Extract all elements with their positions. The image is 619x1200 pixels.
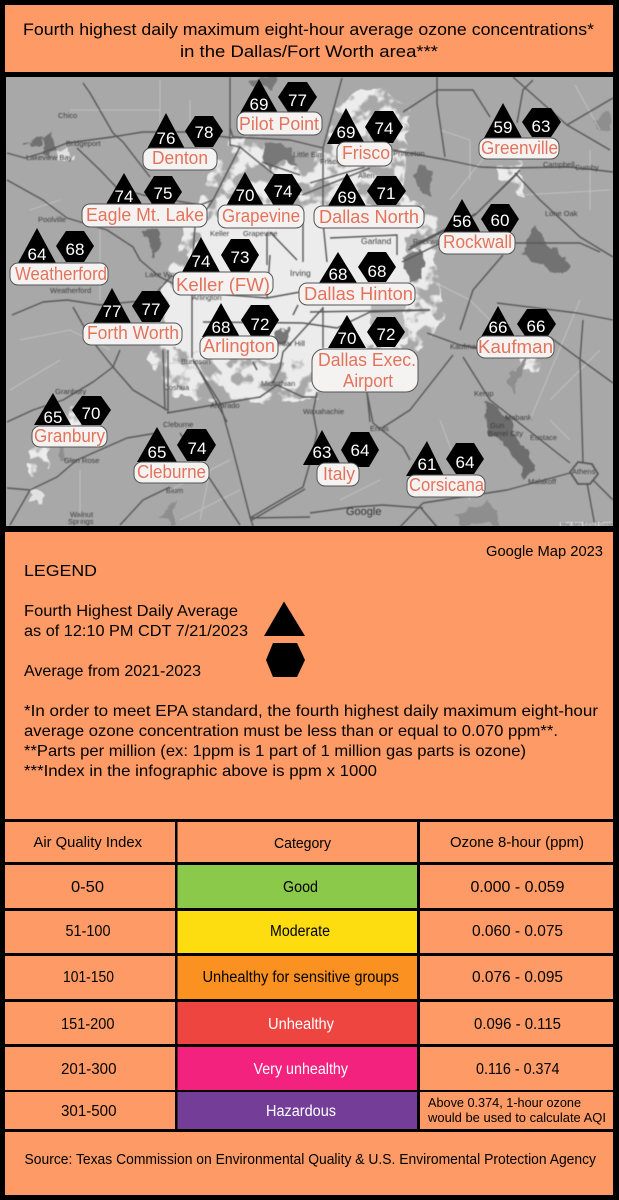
site marker: Italy xyxy=(303,430,379,486)
site marker: Rockwall: Rockwall xyxy=(443,232,512,252)
row: Unhealthy for sensitive groups xyxy=(5,956,613,999)
table header row xyxy=(5,822,613,862)
map place names: Malakoff xyxy=(528,477,557,486)
row: Hazardous: Hazardous xyxy=(266,1103,336,1120)
site marker: Kaufman: 66 xyxy=(527,317,545,336)
map place names: Kaufman xyxy=(450,342,480,351)
row: Very unhealthy: Very unhealthy xyxy=(254,1061,348,1078)
map place names: Frisco xyxy=(320,157,340,166)
site marker: Granbury: Granbury xyxy=(34,426,105,446)
site marker: Arlington: 72 xyxy=(251,315,269,334)
site marker: Frisco: Frisco xyxy=(342,143,390,163)
site marker: Grapevine: Grapevine xyxy=(222,206,300,226)
row: Good: 0-50 xyxy=(71,879,104,896)
map place names: Lone Oak xyxy=(545,209,578,218)
site marker: Weatherford: 64 xyxy=(28,245,46,264)
site marker: Eagle Mt. Lake: 75 xyxy=(154,184,172,203)
site marker: Greenville: Greenville xyxy=(481,138,558,158)
site marker: Grapevine: 74 xyxy=(274,182,292,201)
row: Very unhealthy: 201-300 xyxy=(61,1061,117,1078)
table header row: Category xyxy=(274,835,331,852)
site marker: Frisco xyxy=(327,108,403,166)
site marker: Eagle Mt. Lake: Eagle Mt. Lake xyxy=(86,205,204,225)
site marker: Dallas North: Dallas North xyxy=(319,207,419,227)
site marker: Pilot Point: 69 xyxy=(250,95,268,114)
site marker: Arlington: 68 xyxy=(212,318,230,337)
map place names: Burleson xyxy=(181,357,211,366)
site marker: Grapevine: 70 xyxy=(236,186,254,205)
map place names: Campbell xyxy=(543,160,575,169)
site marker: Arlington xyxy=(200,303,279,359)
map place names: Princeton xyxy=(393,149,425,158)
map place names: Garland xyxy=(361,236,392,246)
row: Moderate: 51-100 xyxy=(66,923,111,940)
site marker: Denton: 76 xyxy=(157,129,175,148)
source footer: Source: Texas Commission on Environmental Quality & U.S. Enviromental Protection Agency xyxy=(24,1152,597,1168)
row: Good xyxy=(5,865,613,908)
map place names: Cleburne xyxy=(163,420,193,429)
site marker: Dallas Exec. Airport: Dallas Exec. xyxy=(318,350,416,370)
site marker: Keller (FW): Keller (FW) xyxy=(176,275,270,295)
site marker: Weatherford xyxy=(10,228,108,285)
row: Moderate: Moderate xyxy=(270,923,330,940)
source footer xyxy=(5,1132,613,1195)
site marker: Keller (FW): 73 xyxy=(231,248,249,267)
site marker: Rockwall: 56 xyxy=(453,212,471,231)
site marker: Corsicana: Corsicana xyxy=(409,475,485,495)
site marker: Italy: Italy xyxy=(323,464,355,484)
legend entry: fourth highest daily average xyxy=(24,602,305,640)
site marker: Forth Worth: 77 xyxy=(103,302,121,321)
map place names: Waxahachie xyxy=(303,407,344,416)
map place names: Glen Rose xyxy=(64,456,99,465)
site marker: Dallas North xyxy=(314,173,424,228)
row: Hazardous xyxy=(5,1092,613,1129)
map place names: Arlington xyxy=(192,293,222,302)
row: Unhealthy for sensitive groups: 0.076 - 0.095 xyxy=(472,969,563,986)
site marker: Dallas Exec. Airport: Airport xyxy=(343,371,393,391)
row: Moderate: 0.060 - 0.075 xyxy=(472,923,563,940)
map place names: Lake Worth xyxy=(145,270,183,279)
site marker: Forth Worth xyxy=(83,288,182,345)
map place names: Athens xyxy=(572,467,596,476)
map place names: Weatherford xyxy=(50,286,91,295)
site marker: Italy: 63 xyxy=(313,443,331,462)
title banner: Fourth highest daily maximum eight-hour average ozone concentrations* xyxy=(23,21,595,39)
map place names: Little Elm xyxy=(293,150,324,159)
map place names: Granbury xyxy=(55,387,87,396)
map place names: Kemp xyxy=(474,389,494,398)
footnotes: **Parts per million (ex: 1ppm is 1 part of 1 million gas parts is ozone) xyxy=(24,743,526,760)
site marker: Greenville: 59 xyxy=(494,118,512,137)
legend entry: average from 2021-2023: Average from 2021-2023 xyxy=(24,663,201,680)
row: Very unhealthy xyxy=(5,1047,613,1090)
row: Hazardous: would be used to calculate AQI xyxy=(427,1110,606,1125)
site marker: Weatherford: 68 xyxy=(66,240,84,259)
air quality table xyxy=(5,822,613,1129)
site marker: Rockwall xyxy=(439,199,519,254)
map place names: Springs xyxy=(68,517,94,526)
site marker: Dallas Hinton: 68 xyxy=(368,262,386,281)
footnotes: ***Index in the infographic above is ppm x 1000 xyxy=(24,763,377,780)
site marker: Granbury: 65 xyxy=(44,408,62,427)
site marker: Cleburne: 74 xyxy=(188,439,206,458)
legend entry: fourth highest daily average: as of 12:10 PM CDT 7/21/2023 xyxy=(24,623,248,640)
row: Unhealthy xyxy=(5,1002,613,1044)
map place names xyxy=(26,111,599,526)
legend heading: LEGEND xyxy=(24,563,97,580)
site marker: Denton: 78 xyxy=(195,123,213,142)
site marker: Weatherford: Weatherford xyxy=(15,264,107,284)
site marker: Dallas Exec. Airport: 72 xyxy=(377,325,395,344)
map place names: Rockwall xyxy=(413,237,443,246)
site marker: Dallas Hinton xyxy=(299,252,415,305)
site marker: Eagle Mt. Lake: 74 xyxy=(115,187,133,206)
row: Unhealthy: 0.096 - 0.115 xyxy=(474,1016,561,1033)
map place names: Bridgeport xyxy=(66,139,102,148)
site marker: Cleburne: Cleburne xyxy=(137,462,206,482)
site marker: Corsicana: 64 xyxy=(456,453,474,472)
site marker: Corsicana xyxy=(406,441,485,497)
site marker: Keller (FW): 74 xyxy=(192,252,210,271)
site marker: Granbury xyxy=(32,393,111,447)
footnotes xyxy=(24,703,599,780)
title banner xyxy=(5,5,613,72)
map place names: Midlothian xyxy=(261,379,295,388)
site marker: Kaufman xyxy=(477,306,556,358)
map place names: Blum xyxy=(166,486,183,495)
map place names: Eustace xyxy=(530,433,557,442)
title banner: in the Dallas/Fort Worth area*** xyxy=(180,43,439,61)
row: Unhealthy for sensitive groups: 101-150 xyxy=(63,969,114,986)
site marker: Keller (FW) xyxy=(173,237,273,295)
site marker: Frisco: 69 xyxy=(337,123,355,142)
map place names: Keller xyxy=(210,229,230,238)
map place names: Grapevine xyxy=(243,229,278,238)
table header row: Ozone 8-hour (ppm) xyxy=(450,834,584,851)
row: Unhealthy: 151-200 xyxy=(61,1016,115,1033)
site marker: Granbury: 70 xyxy=(82,404,100,423)
site marker: Greenville: 63 xyxy=(532,117,550,136)
site marker: Dallas Hinton: 68 xyxy=(329,265,347,284)
legend entry: fourth highest daily average: Fourth Highest Daily Average xyxy=(24,603,238,620)
site marker: Frisco: 74 xyxy=(375,119,393,138)
map place names: Gun xyxy=(490,421,504,430)
site marker: Dallas Exec. Airport: 70 xyxy=(338,329,356,348)
map place names: Poolville xyxy=(38,215,66,224)
legend entry: average from 2021-2023 xyxy=(24,643,305,680)
map of Dallas/Fort Worth area xyxy=(6,77,616,528)
site marker: Dallas Exec. Airport xyxy=(312,315,418,392)
map credit: Google Map 2023 xyxy=(486,544,603,560)
site marker: Corsicana: 61 xyxy=(418,455,436,474)
minor roads xyxy=(10,80,610,525)
map place names: Barrel City xyxy=(488,429,523,438)
major roads xyxy=(7,77,613,527)
site marker: Pilot Point: Pilot Point xyxy=(239,114,319,134)
site marker: Grapevine xyxy=(218,172,304,228)
map place names: Chico xyxy=(58,111,77,120)
row: Good: 0.000 - 0.059 xyxy=(470,879,564,896)
footnotes: average ozone concentration must be less than or equal to 0.070 ppm**. xyxy=(24,723,558,740)
map place names: Joshua xyxy=(165,383,190,392)
site marker: Kaufman: 66 xyxy=(489,318,507,337)
legend panel xyxy=(5,532,613,819)
site marker: Arlington: Arlington xyxy=(203,336,275,356)
map place names: Google xyxy=(346,506,381,518)
footnotes: *In order to meet EPA standard, the fourth highest daily maximum eight-hour xyxy=(24,703,599,720)
site marker: Kaufman: Kaufman xyxy=(478,337,553,357)
map place names: Irving xyxy=(290,268,311,278)
map place names: Walnut xyxy=(70,510,94,519)
map place names: Lakeview Bay xyxy=(26,153,73,162)
map place names: Allen xyxy=(358,171,375,180)
site marker: Denton xyxy=(143,113,223,170)
map place names: Mabank xyxy=(505,413,532,422)
row: Good: Good xyxy=(283,879,318,896)
row: Unhealthy for sensitive groups: Unhealthy for sensitive groups xyxy=(202,969,399,986)
table header row: Air Quality Index xyxy=(34,834,142,851)
site marker: Greenville xyxy=(479,103,561,159)
site marker: Pilot Point xyxy=(237,79,322,135)
site marker: Denton: Denton xyxy=(152,148,208,168)
site marker: Pilot Point: 77 xyxy=(288,91,307,110)
site marker: Cleburne xyxy=(134,427,216,483)
map of Dallas/Fort Worth area: Map data ©2023 Google xyxy=(561,521,616,528)
site marker: Forth Worth: 77 xyxy=(142,300,160,319)
site marker: Forth Worth: Forth Worth xyxy=(87,323,179,343)
map place names: Cedar Hill xyxy=(272,339,305,348)
map place names: Ennis xyxy=(370,424,389,433)
row: Hazardous: Above 0.374, 1-hour ozone xyxy=(428,1095,581,1110)
row: Hazardous: 301-500 xyxy=(61,1103,117,1120)
site marker: Rockwall: 60 xyxy=(491,211,509,230)
row: Unhealthy: Unhealthy xyxy=(268,1016,334,1033)
map place names: Alvarado xyxy=(210,401,240,410)
map place names: Cumby xyxy=(575,163,599,172)
row: Very unhealthy: 0.116 - 0.374 xyxy=(476,1061,560,1078)
site marker: Dallas Hinton: Dallas Hinton xyxy=(304,284,413,304)
site marker: Dallas North: 71 xyxy=(377,184,395,203)
site marker: Eagle Mt. Lake xyxy=(82,173,207,227)
row: Moderate xyxy=(5,911,613,953)
site marker: Italy: 64 xyxy=(351,441,369,460)
site marker: Dallas North: 69 xyxy=(338,188,356,207)
site marker: Cleburne: 65 xyxy=(148,443,166,462)
